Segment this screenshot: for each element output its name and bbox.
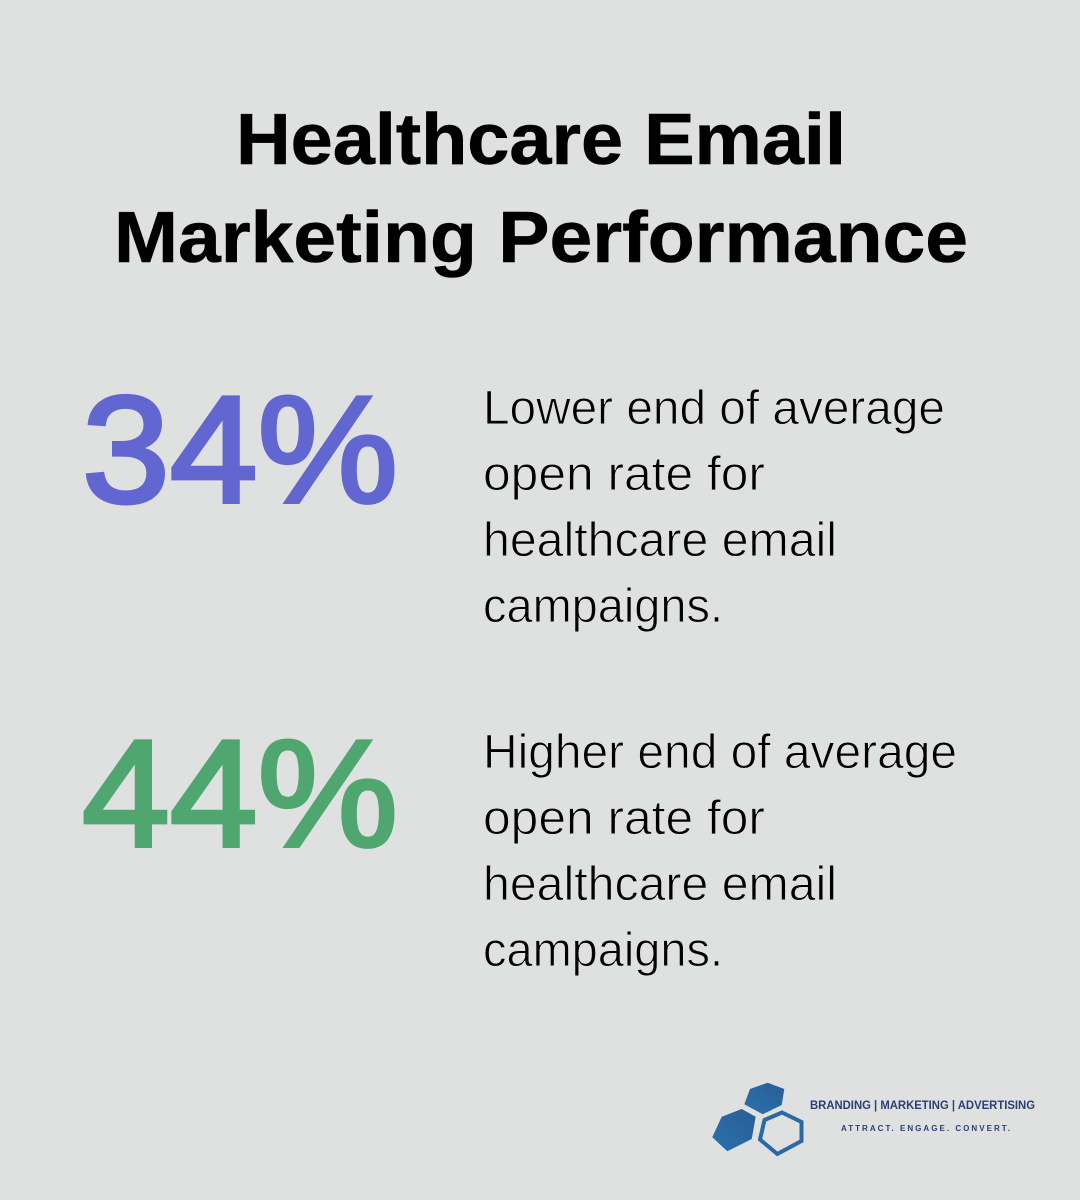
text block: higher end description: open rate for	[483, 792, 765, 845]
icon: hexagon cluster	[712, 1083, 802, 1154]
title	[114, 100, 968, 278]
logo text: BRANDING | MARKETING | ADVERTISING	[810, 1100, 1035, 1112]
text block: lower end description: open rate for	[483, 448, 765, 501]
text block: higher end description: campaigns.	[483, 924, 723, 977]
text block: higher end description: Higher end of average	[483, 726, 957, 779]
title: Healthcare Email	[236, 100, 846, 180]
text block: lower end description	[483, 382, 945, 633]
title: Marketing Performance	[114, 198, 968, 278]
text block: higher end description: healthcare email	[483, 858, 837, 911]
text block: lower end description: Lower end of average	[483, 382, 945, 435]
text block: higher end description	[483, 726, 957, 977]
stat: 44%: 44%	[82, 709, 398, 879]
text block: lower end description: healthcare email	[483, 514, 837, 567]
logo	[712, 1083, 1035, 1154]
logo text: ATTRACT. ENGAGE. CONVERT.	[841, 1124, 1010, 1133]
text block: lower end description: campaigns.	[483, 580, 723, 633]
logo text	[810, 1100, 1035, 1133]
stat: 34%: 34%	[82, 365, 398, 535]
